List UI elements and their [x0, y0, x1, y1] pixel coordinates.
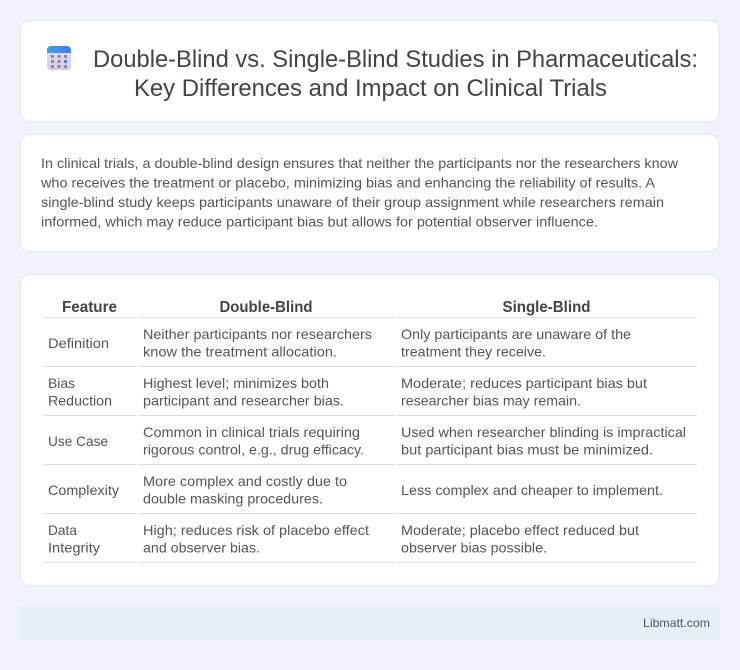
footer credit: Libmatt.com [643, 616, 710, 630]
row: complexity: Less complex and cheaper to implement. [401, 482, 663, 498]
intro text block: In clinical trials, a double-blind design ensures that neither the participants nor the researchers know [41, 155, 679, 171]
row: data integrity: and observer bias. [143, 540, 260, 556]
row: bias reduction: Highest level; minimizes both [143, 375, 329, 391]
row: use case: Use Case [48, 433, 108, 449]
row: definition: Only participants are unaware of the [401, 326, 631, 342]
row: data integrity: Data [48, 522, 77, 538]
row: data integrity: Moderate; placebo effect reduced but [401, 522, 639, 538]
row: bias reduction: Reduction [48, 392, 112, 408]
intro text block: informed, which may reduce participant bias but allows for potential observer influence. [41, 214, 598, 230]
table header row: Double-Blind [220, 299, 312, 316]
row: bias reduction: researcher bias may remain. [401, 392, 581, 408]
table header row: Feature [62, 299, 117, 316]
row: definition: Definition [48, 335, 109, 351]
row: data integrity: High; reduces risk of placebo effect [143, 522, 369, 538]
row: bias reduction: Moderate; reduces participant bias but [401, 375, 647, 391]
row: definition: know the treatment allocation. [143, 344, 337, 360]
table header row: Single-Blind [502, 299, 590, 316]
row: definition [48, 326, 631, 360]
row: use case: Common in clinical trials requiring [143, 424, 360, 440]
row: bias reduction [48, 375, 647, 408]
row: bias reduction: Bias [48, 375, 75, 391]
row: definition: treatment they receive. [401, 344, 546, 360]
table header row [62, 299, 590, 316]
row: use case: Used when researcher blinding is impractical [401, 424, 686, 440]
row: data integrity: observer bias possible. [401, 540, 547, 556]
row: definition: Neither participants nor researchers [143, 326, 372, 342]
title: Key Differences and Impact on Clinical Trials [134, 75, 607, 102]
panel: comparison table [20, 274, 720, 586]
row: use case [48, 424, 686, 458]
icon: calendar [47, 46, 71, 70]
intro text block: who receives the treatment or placebo, minimizing bias and enhancing the reliability of results. A [40, 174, 656, 190]
table rules [43, 317, 697, 563]
row: complexity: Complexity [48, 482, 119, 498]
row: complexity [48, 473, 663, 506]
title: Double-Blind vs. Single-Blind Studies in Pharmaceuticals: [93, 46, 698, 73]
footer band [20, 606, 720, 640]
row: complexity: double masking procedures. [143, 490, 323, 506]
intro text block: single-blind study keeps participants unaware of their group assignment while researchers remain [41, 194, 664, 210]
row: use case: but participant bias must be minimized. [401, 442, 653, 458]
row: data integrity: Integrity [48, 540, 100, 556]
title [93, 46, 698, 102]
row: data integrity [48, 522, 639, 556]
panel: title header [20, 20, 720, 122]
panel: introduction [20, 134, 720, 252]
intro text block [40, 155, 679, 230]
row: complexity: More complex and costly due to [143, 473, 347, 489]
row: bias reduction: participant and researcher bias. [143, 392, 344, 408]
row: use case: rigorous control, e.g., drug efficacy. [143, 442, 364, 458]
